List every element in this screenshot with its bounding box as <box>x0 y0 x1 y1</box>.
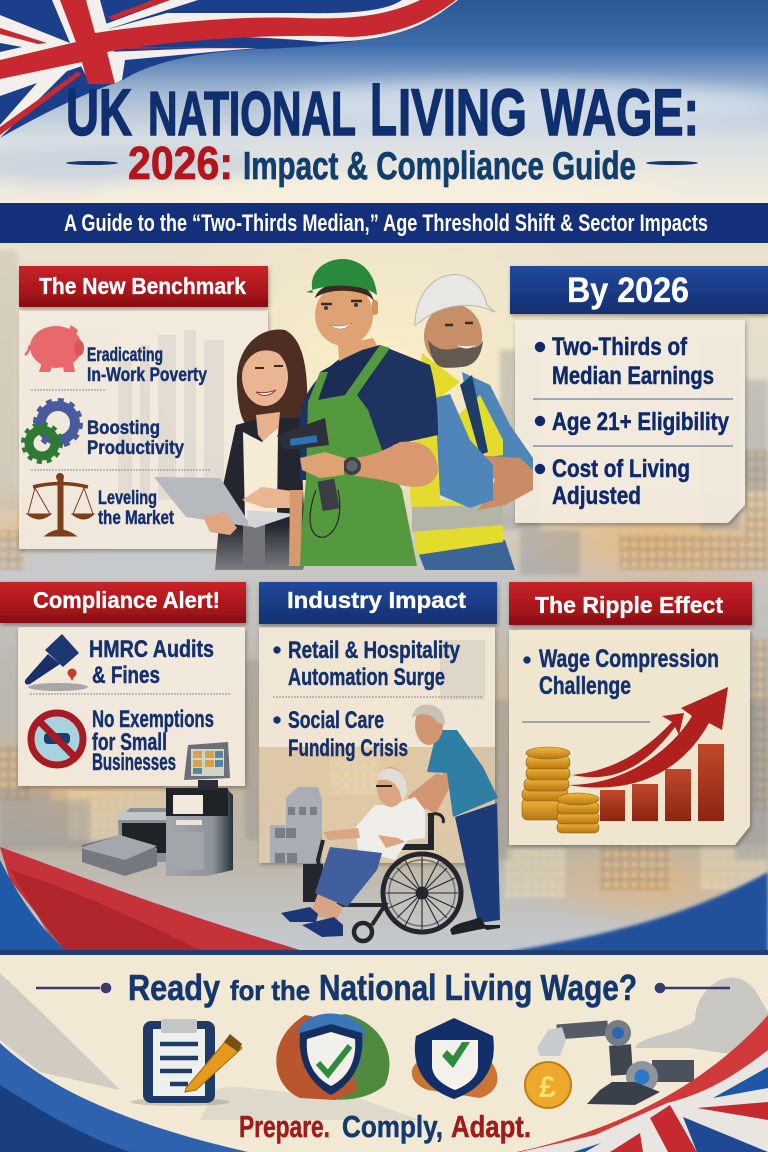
text: exemptions: for Small <box>92 729 167 756</box>
background: blue ribbon right <box>500 872 768 953</box>
panel header: Compliance Alert! <box>33 587 220 613</box>
icon: navy shield <box>412 1018 497 1099</box>
list <box>274 637 461 762</box>
tagline: Comply, <box>342 1109 443 1144</box>
panel header: By 2026 <box>567 271 689 310</box>
panel: The Ripple Effect <box>509 582 752 845</box>
cta heading: National Living Wage? <box>319 967 637 1008</box>
list: Social Care <box>288 707 384 734</box>
coin stacks <box>522 747 599 833</box>
list: Median Earnings <box>552 362 714 390</box>
bar chart <box>600 744 724 821</box>
text: wage compression: Challenge <box>539 672 631 700</box>
text: eradicating: Eradicating <box>87 345 163 366</box>
title: L <box>370 68 397 151</box>
icon: shield with colour blob <box>276 1014 389 1100</box>
icon: clipboard and pencil <box>130 1019 242 1106</box>
text: exemptions: Businesses <box>92 749 176 776</box>
panel header: Industry Impact <box>287 587 466 613</box>
list: Age 21+ Eligibility <box>552 408 729 436</box>
text: exemptions: No Exemptions <box>92 706 214 733</box>
flag top left <box>0 0 458 138</box>
background: middle city scene <box>0 200 768 958</box>
title <box>66 68 699 151</box>
panel header <box>19 266 268 307</box>
text: wage compression: Wage Compression <box>539 645 719 673</box>
icon: no entry <box>31 713 83 765</box>
text: HMRC: HMRC Audits <box>89 636 214 663</box>
title: NATIONAL <box>148 80 356 149</box>
background: bottom panel <box>0 950 768 1152</box>
title: WAGE: <box>541 75 699 149</box>
subtitle band <box>0 203 768 243</box>
tagline: Adapt. <box>451 1109 531 1144</box>
text: eradicating: In-Work Poverty <box>87 365 207 386</box>
carer <box>407 704 500 935</box>
list: Retail & Hospitality <box>288 637 461 664</box>
text: leveling <box>98 488 175 529</box>
list: Funding Crisis <box>288 735 408 762</box>
panel: Industry Impact <box>259 582 497 863</box>
panel: By 2026 <box>510 266 768 523</box>
illustration: hi-vis worker <box>410 275 533 570</box>
wheelchair frame <box>303 813 461 941</box>
panel header <box>0 582 246 623</box>
seated man <box>281 767 425 937</box>
scanner <box>277 418 340 537</box>
background: clouds <box>0 81 768 204</box>
text: wage compression <box>524 645 719 700</box>
title: IVING <box>398 75 527 149</box>
text: boosting <box>87 418 184 459</box>
illustration: office worker <box>154 329 307 570</box>
flag bottom right <box>517 1015 768 1152</box>
icon: scales <box>27 474 94 536</box>
tagline: Prepare. <box>239 1109 330 1144</box>
panel header: The New Benchmark <box>39 273 246 299</box>
cta heading: for the <box>230 975 310 1006</box>
subtitle <box>66 137 698 189</box>
city building <box>270 787 322 863</box>
text: exemptions <box>92 706 214 776</box>
icon: robot arm with pound coin: £ <box>539 1071 556 1104</box>
background: sky <box>0 0 768 205</box>
panel header: The Ripple Effect <box>535 592 723 618</box>
panel: Compliance Alert <box>0 582 246 786</box>
title: UK <box>66 75 132 149</box>
text: HMRC: & Fines <box>92 662 160 689</box>
background: red ribbon left <box>0 847 310 953</box>
list: Adjusted <box>552 482 641 510</box>
cta heading <box>36 967 730 1008</box>
icon: gears <box>23 400 81 462</box>
list: Automation Surge <box>288 664 445 691</box>
text: leveling: Leveling <box>98 488 157 509</box>
illustration: retail worker <box>277 259 438 566</box>
cta heading: Ready <box>128 967 220 1008</box>
list: Two-Thirds of <box>552 333 688 361</box>
text: boosting: Productivity <box>87 438 184 459</box>
icon: robot arm with pound coin <box>525 1020 694 1108</box>
arrows <box>568 687 728 787</box>
background: blue ribbon left <box>0 860 70 953</box>
background: red ribbon highlight <box>10 870 200 953</box>
text: HMRC <box>89 636 214 689</box>
panel header <box>509 582 752 625</box>
illustration: carer and wheelchair user <box>281 704 500 941</box>
icon: piggy bank <box>25 325 84 372</box>
subtitle: Impact & Compliance Guide <box>243 145 636 188</box>
list <box>535 333 729 510</box>
text: leveling: the Market <box>98 508 175 529</box>
subtitle: 2026: <box>128 137 233 189</box>
panel: The New Benchmark <box>19 266 268 549</box>
panel header <box>510 266 768 314</box>
text: boosting: Boosting <box>87 418 160 439</box>
icon: gavel <box>25 634 88 691</box>
list: Cost of Living <box>552 455 690 483</box>
illustration: self-checkout kiosk <box>80 742 233 876</box>
tagline <box>239 1109 531 1144</box>
panel header <box>259 582 497 624</box>
text: eradicating <box>87 345 207 386</box>
panel body <box>515 320 745 523</box>
laptop <box>154 477 297 528</box>
